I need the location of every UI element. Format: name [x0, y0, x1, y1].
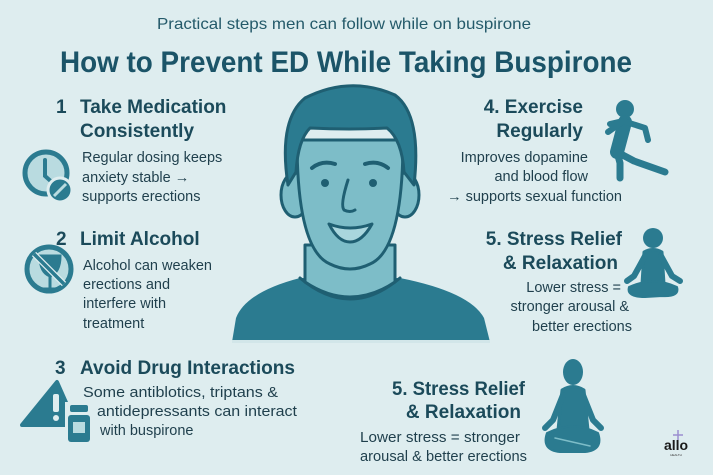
section 3: Avoid Drug Interactions: 3	[55, 358, 66, 379]
section 2: Limit Alcohol: 2	[56, 229, 67, 250]
section 3: Avoid Drug Interactions: Some antiblotics, triptans &	[83, 385, 278, 401]
icon: no alcohol	[27, 247, 71, 291]
section 5: Stress Relief (bottom): & Relaxation	[406, 402, 521, 423]
section 3: Avoid Drug Interactions: with buspirone	[99, 423, 194, 439]
section 3: Avoid Drug Interactions: antidepressants can interact	[97, 404, 297, 420]
icon: meditation	[627, 228, 680, 297]
section 2: Limit Alcohol: interfere with	[83, 296, 166, 312]
title: How to Prevent ED While Taking Buspirone	[60, 46, 632, 79]
section 1: Take Medication Consistently: Regular dosing keeps	[82, 150, 222, 166]
section 5: Stress Relief (right): stronger arousal &	[511, 299, 629, 315]
section 4: Exercise Regularly: and blood flow	[494, 169, 589, 185]
section 5: Stress Relief (right): & Relaxation	[503, 253, 618, 274]
section 4: Exercise Regularly	[447, 97, 665, 205]
section 2: Limit Alcohol: treatment	[83, 316, 144, 332]
section 1: Take Medication Consistently: 1	[56, 97, 67, 118]
logo: allo health	[664, 430, 688, 457]
section 1: Take Medication Consistently: supports erections	[82, 189, 200, 205]
section 5: Stress Relief (bottom): 5. Stress Relief	[392, 379, 526, 400]
section 3: Avoid Drug Interactions	[22, 358, 297, 445]
icon: clock with pill	[25, 152, 72, 202]
section 3: Avoid Drug Interactions: Avoid Drug Interactions	[80, 358, 295, 379]
section 5: Stress Relief (right): 5. Stress Relief	[486, 229, 623, 250]
section 1: Take Medication Consistently	[25, 97, 226, 205]
section 5: Stress Relief (bottom): arousal & better erections	[360, 449, 527, 465]
section 5: Stress Relief (right)	[486, 228, 680, 335]
icon: warning and pill bottle	[22, 382, 92, 445]
logo: allo health: HEALTH	[670, 453, 682, 457]
section 1: Take Medication Consistently: Take Medication	[80, 97, 226, 118]
section 2: Limit Alcohol	[27, 229, 212, 332]
section 5: Stress Relief (right): Lower stress =	[526, 280, 621, 296]
section 1: Take Medication Consistently: anxiety stable →	[82, 170, 189, 186]
section 2: Limit Alcohol: Limit Alcohol	[80, 229, 200, 250]
section 2: Limit Alcohol: Alcohol can weaken	[83, 258, 212, 274]
icon: runner	[608, 100, 665, 178]
section 4: Exercise Regularly: Improves dopamine	[461, 150, 588, 166]
section 5: Stress Relief (bottom): Lower stress = stronger	[360, 430, 520, 446]
section 4: Exercise Regularly: Regularly	[496, 121, 583, 142]
icon: meditation large	[545, 359, 601, 452]
section 4: Exercise Regularly: → supports sexual function	[447, 189, 622, 205]
section 2: Limit Alcohol: erections and	[83, 277, 170, 293]
section 5: Stress Relief (bottom)	[360, 359, 601, 465]
illustration: man	[232, 86, 490, 342]
section 1: Take Medication Consistently: Consistently	[80, 121, 194, 142]
logo: allo health: allo	[664, 437, 688, 453]
section 4: Exercise Regularly: 4. Exercise	[484, 97, 583, 118]
subtitle: Practical steps men can follow while on buspirone	[157, 16, 531, 33]
section 5: Stress Relief (right): better erections	[532, 319, 632, 335]
